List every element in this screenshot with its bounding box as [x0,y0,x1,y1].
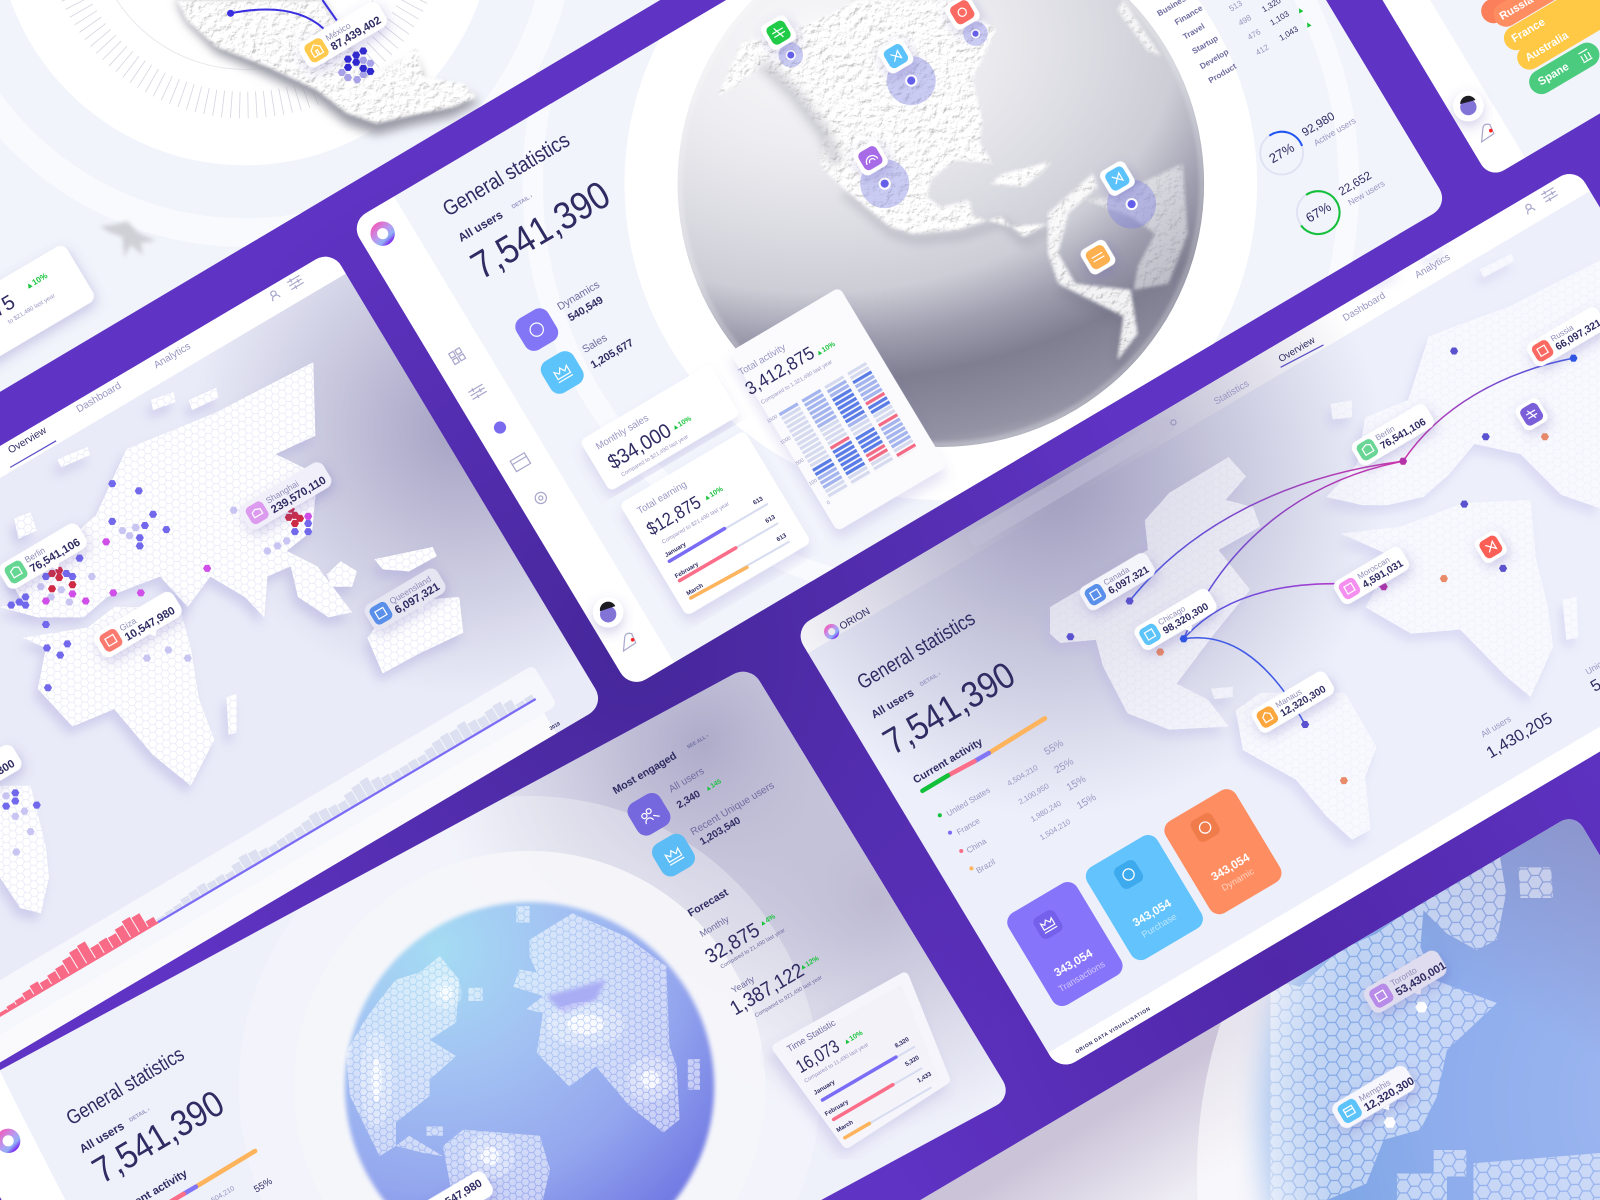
label: Memphis: Memphis [1357,1077,1393,1104]
card: total earning: 613 [764,513,777,525]
hex land [1270,857,1600,1200]
footer band [1048,591,1600,1071]
label: Queensland: Queensland [388,574,433,606]
card: monthly sales [580,364,740,492]
heading: General statistics [438,128,574,221]
row: United States: 55% [1042,738,1066,758]
gauge: new users: New users [1346,178,1387,208]
label: Manaus: Manaus [1274,687,1303,710]
card: total activity: ▲10% [814,340,837,358]
card: time statistic: March [835,1119,855,1134]
industry table: ▲ [1294,4,1306,16]
globe rings [239,796,820,1200]
logo [0,1132,17,1150]
heatmap [779,362,917,499]
most engaged: SEE ALL › [686,733,710,751]
forecast: 32,875 [702,919,764,968]
label: Memphis: 12,320,300 [1362,1075,1417,1114]
card: purchase: Purchase [1140,911,1178,940]
hexagon world map [1046,239,1600,848]
heatmap axis: 1500 [766,414,779,425]
card: total earning: January [664,541,688,559]
panel: blue globe dashboard [0,643,1041,1200]
all users label: All users [869,687,916,721]
heatmap axis: 1000 [779,435,792,446]
row: France: 25% [1053,756,1076,776]
heatmap axis: 0 [826,500,831,506]
card: total earning: March [685,582,705,597]
forecast: ▲12% [798,954,821,972]
label: Berlin [0,521,92,596]
map dots [1066,347,1578,784]
highlighted hexagons [1384,1002,1428,1128]
label: Shanghai: 239,570,110 [269,474,328,516]
footer text: ORION DATA VISUALISATION [1075,1006,1152,1055]
detail link: DETAIL › [128,1107,151,1124]
industry table: 1,103 [1268,9,1291,27]
most engaged: Most engaged [611,750,679,797]
blue hexagon globe [345,902,714,1200]
card: transactions: Transactions [1057,959,1107,994]
row: Brazil: Brazil [975,857,997,875]
label: Giza: Giza [118,616,138,633]
pill: top [1481,0,1506,24]
label: Manaus [1249,669,1337,735]
label: Shanghai: Shanghai [264,478,301,506]
land: caribbean [990,161,1051,187]
label: Mexico: México [324,20,353,43]
tabs: Analytics [1413,252,1452,281]
most engaged: Recent Unique users [689,780,776,838]
industry table: 476 [1246,27,1263,42]
card: earning fragment: to $21,490 last year [7,292,56,326]
icon: sliders [1540,186,1559,204]
stat: dynamics [511,279,605,355]
stat: sales: Sales [580,332,610,356]
industry table: ▲ [1302,19,1314,30]
card: total earning: 613 [775,532,788,543]
icon marker: purple [1513,396,1550,432]
year label: 2019 [549,721,562,732]
pill: Russia [1494,0,1554,27]
card: time statistic: January [813,1078,837,1097]
label: Canada: 6,097,321 [1107,564,1152,597]
label: Toronto: Toronto [1388,965,1419,988]
pill list [1477,0,1600,99]
heading: General statistics [854,608,979,694]
card: transactions [1003,878,1127,1010]
panel: Mexico map [0,0,673,403]
heatmap axis: 500 [795,457,805,467]
highlighted hexagons: magenta [42,513,312,605]
detail link: DETAIL › [511,194,534,211]
stat: dynamics: Dynamics [555,279,602,313]
map markers [759,0,1156,277]
row: France: 2,100,950 [1017,781,1051,806]
row: China: China [965,836,988,855]
total users number: 7,541,390 [876,654,1022,763]
globe rings [533,0,1349,592]
Mexico relief [177,0,480,135]
mountain shading [762,63,837,163]
label: Moroccan: 4,591,031 [1361,558,1406,591]
label: partial [0,742,24,813]
row: United States: 4,504,210 [1005,763,1039,788]
card: total earning: 613 [752,495,765,507]
card: total earning: ▲10% [702,485,725,503]
current activity bar [922,718,1045,791]
marker: blue [876,37,936,105]
hexagon cluster [338,47,374,83]
forecast: Forecast [686,886,731,920]
land: north atlantic [1117,0,1161,56]
most engaged: ▲145 [704,778,723,793]
detail link: DETAIL › [919,671,942,688]
tabs: Overview [6,425,49,456]
card: total earning [619,430,811,616]
card: total earning: Compared to $21,490 last year [661,501,731,546]
industry table: 1,043 [1278,24,1300,43]
soft hexagon highlights [360,977,672,1179]
stat: unique users [1584,654,1600,696]
label: Canada: Canada [1102,565,1131,587]
gauge: active users: 92,980 [1300,110,1338,139]
all users label: All users [456,208,506,245]
label: Memphis [1329,1063,1420,1135]
percent: 55% [252,1176,275,1195]
icon: sliders [286,274,305,291]
icon: settings [535,492,546,504]
country table [938,738,1098,875]
card: time statistic: 1,433 [916,1070,933,1084]
route arcs [1130,358,1573,724]
avatar [593,597,623,628]
row: China [959,774,1088,855]
icon: user [1524,203,1535,214]
card: transactions: 343,054 [1052,947,1095,980]
label: Chicago: 98,320,300 [1161,601,1211,637]
industry table: Product [1207,62,1238,85]
most engaged: 1,203,540 [698,815,743,848]
panel: top right countries [1382,0,1600,172]
label: Manaus: 12,320,300 [1279,684,1328,719]
gauge: new users [1297,169,1387,234]
hex continents [346,906,700,1200]
card: monthly sales: Monthly sales [594,413,651,452]
land: eastern south america [1086,163,1188,290]
card: dynamic [1160,785,1286,918]
bell [1482,124,1494,142]
card: purchase: 343,054 [1130,897,1174,930]
pill: France [1504,0,1600,50]
marker: red [943,0,988,46]
label: Berlin: Berlin [1374,424,1396,442]
coast shadow [842,192,1082,301]
label: Russia: Russia [1549,323,1576,343]
card: monthly sales: ▲10% [670,414,693,432]
card: monthly sales: Compared to $21,490 last year [620,434,690,478]
icon marker: red [1473,529,1509,565]
total users number: 7,541,390 [464,173,618,288]
row: France [948,756,1076,837]
gauge: active users: 27% [1266,140,1297,166]
panel: zoomed blue globe [898,687,1600,1200]
card: monthly sales: $34,000 [604,420,675,474]
rim light [680,0,1202,445]
industry table: Finance [1173,3,1205,27]
forecast: 1,387,122 [727,960,808,1020]
label: Toronto [1361,948,1452,1020]
label: Berlin: 76,541,106 [1379,417,1428,452]
icon: user [268,289,280,301]
panel: Orion world hexagon map [776,133,1600,1092]
row: United States: United States [945,786,992,818]
label: Berlin: Berlin [23,545,47,565]
stat: all users: 1,430,205 [1483,709,1556,762]
pill: Australia [1517,2,1600,70]
most engaged: 2,340 [675,789,703,811]
avatar [1453,91,1484,121]
row: France: France [955,816,982,837]
icon: dashboard [449,348,466,364]
marker: purple [851,139,909,208]
card: time statistic: Compared to 11,490 last year [804,1042,870,1085]
label: Moroccan [1331,544,1412,607]
gauge: new users: 22,652 [1336,169,1374,198]
tabs [1212,252,1452,407]
forecast: Monthly [698,914,731,939]
row: China: 1,980,240 [1029,799,1063,824]
marker: cyan [1098,159,1156,229]
panel: globe dashboard [356,0,1442,682]
stat: all users: All users [1479,713,1513,739]
label: partial globe [402,1168,496,1200]
heatmap axis [766,414,831,506]
highlighted hexagons: blue [2,480,312,810]
stat: sales: 1,205,677 [589,337,636,371]
card: time statistic: 5,320 [904,1054,921,1068]
pill: Australia: Australia [1523,29,1571,64]
gauge: active users [1260,110,1358,174]
card: time statistic: February [824,1098,850,1118]
forecast [686,886,824,1020]
label: Moroccan: Moroccan [1356,555,1391,581]
label: Mexico [296,0,390,70]
row: China: 15% [1065,774,1088,794]
gauge: active users: Active users [1312,115,1358,148]
label: Giza [91,589,187,664]
label: Russia [1524,305,1600,369]
row: United States [938,738,1066,818]
tabs: Dashboard [1341,290,1388,324]
globe [678,0,1204,447]
row: Brazil: 15% [1075,792,1098,812]
card: time statistic: 16,073 [792,1035,843,1077]
current activity bar [153,1151,255,1200]
most engaged: All users [667,766,706,795]
logo: ORION [838,606,872,633]
card: total activity [730,287,947,531]
pill: France: France [1510,16,1547,45]
islet [100,221,156,257]
gauge: new users: 67% [1303,199,1334,225]
highlighted hexagons: light [2,507,291,856]
tabs: Statistics [1212,378,1251,407]
label: Berlin: 76,541,106 [28,536,83,575]
card: time statistic: ▲10% [842,1029,865,1047]
sidebar [350,196,674,689]
card: time statistic: Time Statistic [785,1017,838,1054]
label: Chicago: Chicago [1157,604,1187,627]
logo [826,606,872,637]
tabs [6,341,193,467]
most engaged [611,733,776,880]
row: Brazil: 1,504,210 [1038,817,1072,842]
progress bars [822,1047,931,1138]
marker: orange [1078,238,1118,277]
all users label: All users [77,1119,127,1156]
card: purchase [1082,831,1207,964]
tabs: Analytics [152,341,193,371]
icon: sliders [467,382,488,401]
inland sea [546,980,606,1013]
marker: green [759,13,803,67]
label: Berlin [1349,402,1437,468]
globe ring [1197,687,1600,1200]
forecast: Yearly [729,974,757,995]
heading: General statistics [63,1044,188,1130]
land: andes [1048,173,1138,360]
sidebar [1382,0,1525,172]
timeline chart [0,665,571,1099]
forecast: Compared to 921,490 last year [754,975,824,1019]
card: total activity: 3,412,875 [741,342,818,399]
hexagon world map [0,362,463,921]
icon: globe [494,421,506,434]
card: earning fragment: ▲10% [24,271,50,291]
card: earning fragment [0,246,100,368]
bright hexagon highlights [371,986,659,1165]
stat: dynamics: 540,549 [566,294,605,324]
industry table: 412 [1254,42,1271,57]
heatmap axis: 100 [808,478,819,487]
card: total earning: February [674,560,700,580]
label: Canada [1077,551,1158,613]
label: Shanghai [237,459,334,533]
tabs: Overview [1277,335,1318,365]
label: Toronto: 53,430,001 [1394,960,1448,999]
industry table [1156,0,1314,85]
card: total earning: $12,875 [643,491,704,539]
label: Mexico: 87,439,402 [329,15,383,53]
row: Brazil [969,792,1098,875]
card: time statistic [778,978,945,1143]
header band [0,250,346,689]
blue route arc [231,0,337,29]
card: time statistic: 8,320 [894,1036,911,1050]
forecast: Compared to 21,490 last year [720,928,787,970]
pill: Spane: Spane [1536,61,1571,88]
card: total activity: Compared to 1,321,490 last year [760,359,834,406]
progress bars [669,504,789,598]
card: total activity: Total activity [737,342,788,378]
label: Chicago [1132,586,1222,657]
pill: Spane [1529,42,1600,94]
globe [1255,694,1600,1200]
tabs: Dashboard [75,380,124,415]
header band [794,167,1590,653]
search bar [966,415,1177,548]
industry table: Startup [1190,34,1220,56]
land: north america [717,0,1048,237]
logo [374,225,392,243]
stat: sales [537,332,636,398]
label: Queensland: 6,097,321 [393,581,442,617]
industry table: 498 [1237,13,1253,28]
icon: card [510,453,531,472]
card: dynamic: Dynamic [1220,866,1256,893]
industry table: Travel [1181,22,1206,41]
icon: bell [623,633,636,651]
label: Queensland [362,565,451,637]
current activity label: Current activity [911,736,985,786]
card: dynamic: 343,054 [1209,851,1253,884]
card: total earning: Total earning [636,479,689,517]
forecast: ▲4% [758,912,777,928]
label: Giza: 10,547,980 [123,605,177,644]
sidebar [0,1071,65,1200]
panel: Asia hexagon map [0,235,633,1102]
highlighted hexagons: red [48,506,304,592]
industry table: Develop [1198,47,1230,71]
total users number: 7,541,390 [85,1082,231,1191]
